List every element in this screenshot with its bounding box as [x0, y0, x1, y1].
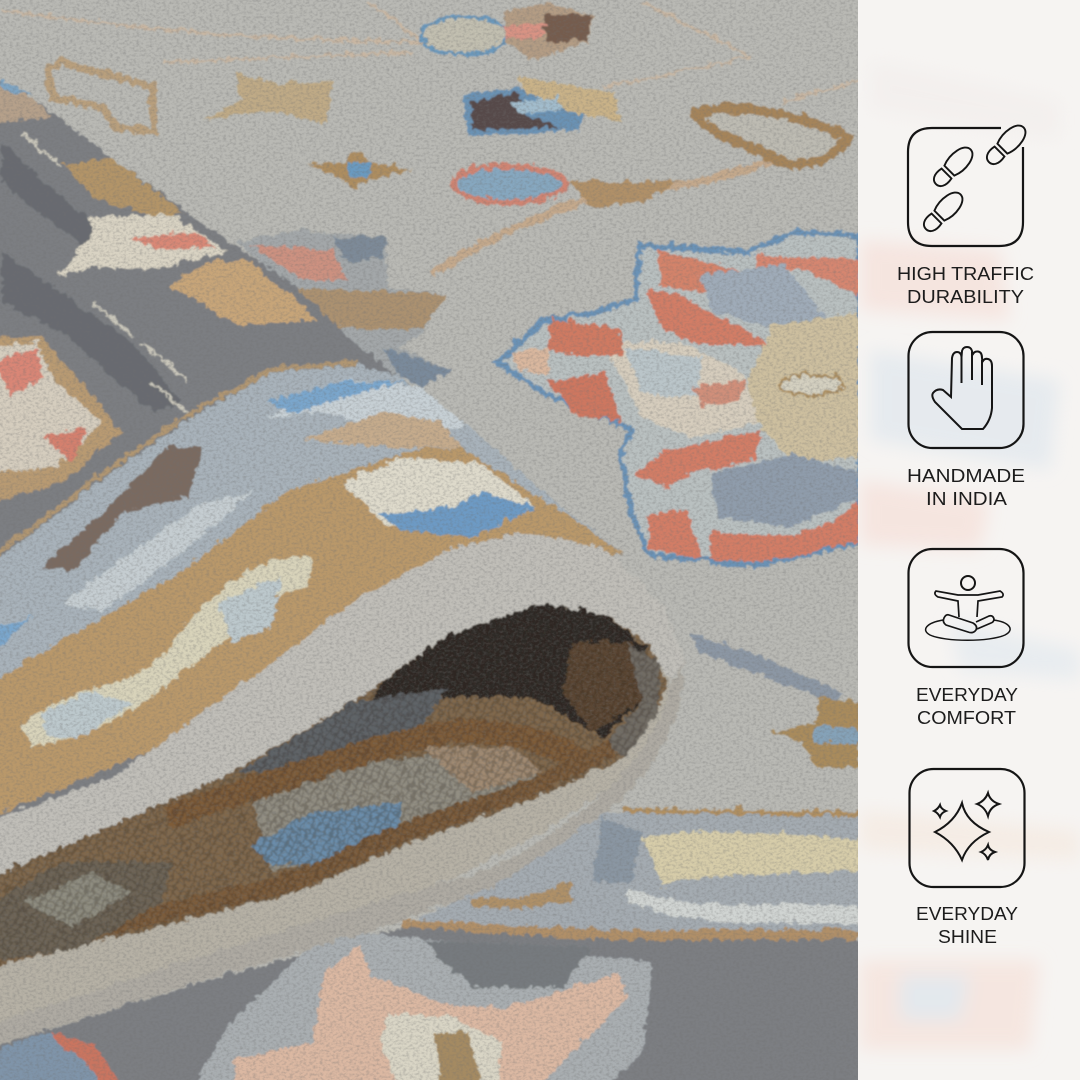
flat rug border band — [400, 808, 870, 938]
roll light blue border band — [0, 360, 620, 815]
feature: handmade in india — [907, 332, 1025, 509]
label: handmade in india: IN INDIA — [926, 489, 1007, 509]
roll gold border band — [0, 447, 620, 815]
label: everyday comfort — [916, 685, 1018, 728]
roll top face: dark field — [0, 75, 620, 900]
icon: footsteps — [908, 121, 1030, 246]
label: high traffic durability: DURABILITY — [907, 287, 1024, 307]
roll field florals — [0, 78, 316, 500]
flat rug top motifs — [0, 0, 858, 272]
label: handmade in india — [907, 466, 1025, 509]
roll bottom edge binding — [0, 660, 683, 1045]
large coral medallion — [496, 230, 857, 563]
label: everyday shine — [916, 904, 1018, 947]
leaf motif lower right — [688, 630, 858, 765]
icon: sparkles — [910, 769, 1024, 887]
feature: high traffic durability — [897, 121, 1034, 307]
feature: everyday comfort — [908, 549, 1024, 728]
flat rug dark field with peach flower — [0, 925, 870, 1080]
roll underside backing — [0, 602, 668, 1040]
label: high traffic durability: HIGH TRAFFIC — [897, 264, 1034, 284]
knit texture — [0, 0, 858, 1080]
label: everyday shine: EVERYDAY — [916, 904, 1018, 924]
label: everyday comfort: COMFORT — [917, 708, 1016, 728]
label: handmade in india: HANDMADE — [907, 466, 1025, 486]
flat rug floral under the roll — [235, 228, 450, 385]
label: high traffic durability — [897, 264, 1034, 307]
icon: hand — [908, 332, 1024, 448]
translucent side panel — [858, 0, 1080, 1080]
label: everyday shine: SHINE — [938, 927, 997, 947]
icon: meditating figure — [908, 549, 1024, 667]
roll cream edge band — [0, 530, 683, 875]
feature: everyday shine — [910, 769, 1024, 947]
label: everyday comfort: EVERYDAY — [916, 685, 1018, 705]
